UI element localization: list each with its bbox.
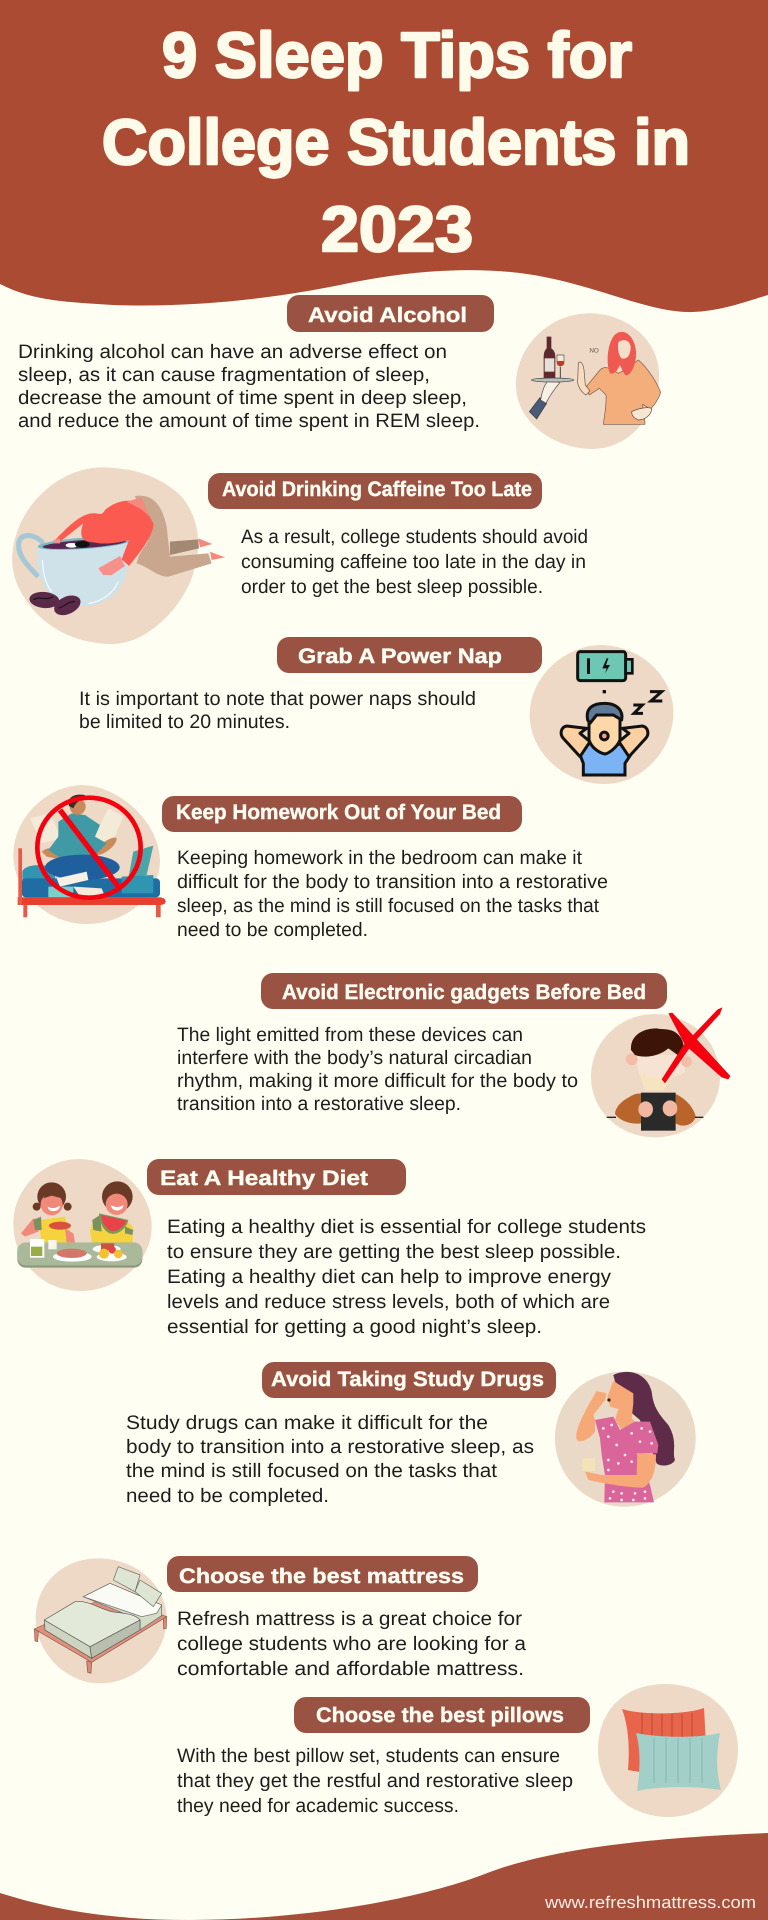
text: healthy diet bbox=[167, 1216, 646, 1338]
text: gadgets bbox=[177, 1024, 578, 1115]
title: 9 Sleep Tips for bbox=[162, 19, 632, 91]
footer wave bbox=[0, 1833, 768, 1920]
text: healthy diet: Eating a healthy diet is essential for college students bbox=[167, 1216, 646, 1238]
text: mattress: college students who are looking for a bbox=[177, 1633, 526, 1655]
heading: mattress: Choose the best mattress bbox=[179, 1565, 464, 1588]
heading: caffeine bbox=[208, 473, 542, 509]
text: mattress: comfortable and affordable mattress. bbox=[177, 1658, 524, 1680]
panel: caffeine bbox=[12, 467, 588, 644]
text: mattress bbox=[177, 1608, 526, 1680]
text: caffeine: order to get the best sleep possible. bbox=[241, 576, 543, 598]
panel: power nap bbox=[79, 637, 673, 784]
text: gadgets: interfere with the body’s natural circadian bbox=[177, 1047, 532, 1069]
heading: power nap: Grab A Power Nap bbox=[298, 645, 502, 668]
text: healthy diet: Eating a healthy diet can help to improve energy bbox=[167, 1266, 611, 1288]
text: homework: need to be completed. bbox=[177, 919, 368, 941]
text: power nap: be limited to 20 minutes. bbox=[79, 711, 290, 733]
icon: no homework in bed bbox=[13, 785, 166, 924]
text: avoid alcohol bbox=[18, 341, 480, 432]
heading: avoid alcohol bbox=[287, 295, 494, 332]
panel: mattress bbox=[34, 1556, 526, 1683]
text: gadgets: The light emitted from these devices can bbox=[177, 1024, 523, 1046]
text: study drugs: the mind is still focused on the tasks that bbox=[126, 1460, 498, 1482]
text: gadgets: rhythm, making it more difficult for the body to bbox=[177, 1070, 578, 1092]
heading: healthy diet bbox=[147, 1159, 406, 1195]
icon: woman taking a pill bbox=[555, 1372, 696, 1507]
icon: bed bbox=[34, 1558, 167, 1683]
heading: homework: Keep Homework Out of Your Bed bbox=[176, 801, 501, 824]
text: healthy diet: levels and reduce stress levels, both of which are bbox=[167, 1291, 610, 1313]
heading: pillows: Choose the best pillows bbox=[316, 1704, 564, 1727]
website url: www.refreshmattress.com bbox=[544, 1893, 756, 1912]
text: avoid alcohol: sleep, as it can cause fragmentation of sleep, bbox=[18, 364, 430, 386]
text: study drugs bbox=[126, 1412, 534, 1507]
heading: study drugs bbox=[262, 1362, 556, 1398]
panel: avoid alcohol bbox=[18, 295, 661, 449]
title: College Students in bbox=[102, 106, 690, 178]
heading: pillows bbox=[294, 1697, 590, 1733]
text: study drugs: body to transition into a restorative sleep, as bbox=[126, 1436, 534, 1458]
panel: pillows bbox=[177, 1684, 738, 1817]
text: study drugs: Study drugs can make it difficult for the bbox=[126, 1412, 488, 1434]
icon: refusing wine bbox=[516, 313, 661, 449]
title: 2023 bbox=[321, 193, 473, 265]
title bbox=[102, 19, 690, 265]
text: mattress: Refresh mattress is a great choice for bbox=[177, 1608, 523, 1630]
text: study drugs: need to be completed. bbox=[126, 1485, 329, 1507]
text: caffeine: consuming caffeine too late in the day in bbox=[241, 551, 586, 573]
icon: person with phone crossed out bbox=[591, 1007, 730, 1137]
top banner wave bbox=[0, 0, 768, 312]
panel: electronic gadgets bbox=[177, 973, 730, 1137]
heading: study drugs: Avoid Taking Study Drugs bbox=[271, 1368, 544, 1391]
icon: low battery and yawning person bbox=[530, 645, 673, 784]
text: healthy diet: essential for getting a good night’s sleep. bbox=[167, 1316, 542, 1338]
text: avoid alcohol: and reduce the amount of time spent in REM sleep. bbox=[18, 410, 480, 432]
icon: children eating bbox=[13, 1159, 152, 1291]
heading: gadgets bbox=[261, 973, 667, 1009]
text: pillows: that they get the restful and restorative sleep bbox=[177, 1770, 573, 1792]
text: homework: Keeping homework in the bedroom can make it bbox=[177, 847, 583, 869]
text: pillows: they need for academic success. bbox=[177, 1795, 459, 1817]
heading: gadgets: Avoid Electronic gadgets Before Bed bbox=[282, 981, 646, 1004]
text: power nap: It is important to note that power naps should bbox=[79, 688, 476, 710]
text: caffeine: As a result, college students should avoid bbox=[241, 526, 588, 548]
text: caffeine bbox=[241, 526, 588, 598]
text: power nap bbox=[79, 688, 476, 733]
text: avoid alcohol: Drinking alcohol can have an adverse effect on bbox=[18, 341, 447, 363]
text: healthy diet: to ensure they are getting the best sleep possible. bbox=[167, 1241, 621, 1263]
icon: two pillows bbox=[598, 1684, 738, 1817]
heading: power nap bbox=[277, 637, 542, 673]
text: homework: sleep, as the mind is still focused on the tasks that bbox=[177, 895, 600, 917]
icon: refusing wine: NO bbox=[589, 347, 599, 354]
text: pillows: With the best pillow set, students can ensure bbox=[177, 1745, 560, 1767]
heading: caffeine: Avoid Drinking Caffeine Too Late bbox=[222, 478, 532, 501]
heading: homework bbox=[162, 796, 522, 832]
heading: avoid alcohol: Avoid Alcohol bbox=[308, 304, 467, 327]
panel: healthy diet bbox=[13, 1159, 646, 1338]
text: pillows bbox=[177, 1745, 573, 1817]
text: homework: difficult for the body to transition into a restorative bbox=[177, 871, 608, 893]
heading: healthy diet: Eat A Healthy Diet bbox=[160, 1167, 368, 1190]
heading: mattress bbox=[167, 1556, 478, 1592]
icon: person in coffee cup bbox=[12, 467, 225, 644]
text: homework bbox=[177, 847, 608, 941]
panel: study drugs bbox=[126, 1362, 696, 1507]
panel: homework bbox=[13, 785, 608, 941]
text: avoid alcohol: decrease the amount of time spent in deep sleep, bbox=[18, 387, 467, 409]
text: gadgets: transition into a restorative sleep. bbox=[177, 1093, 461, 1115]
